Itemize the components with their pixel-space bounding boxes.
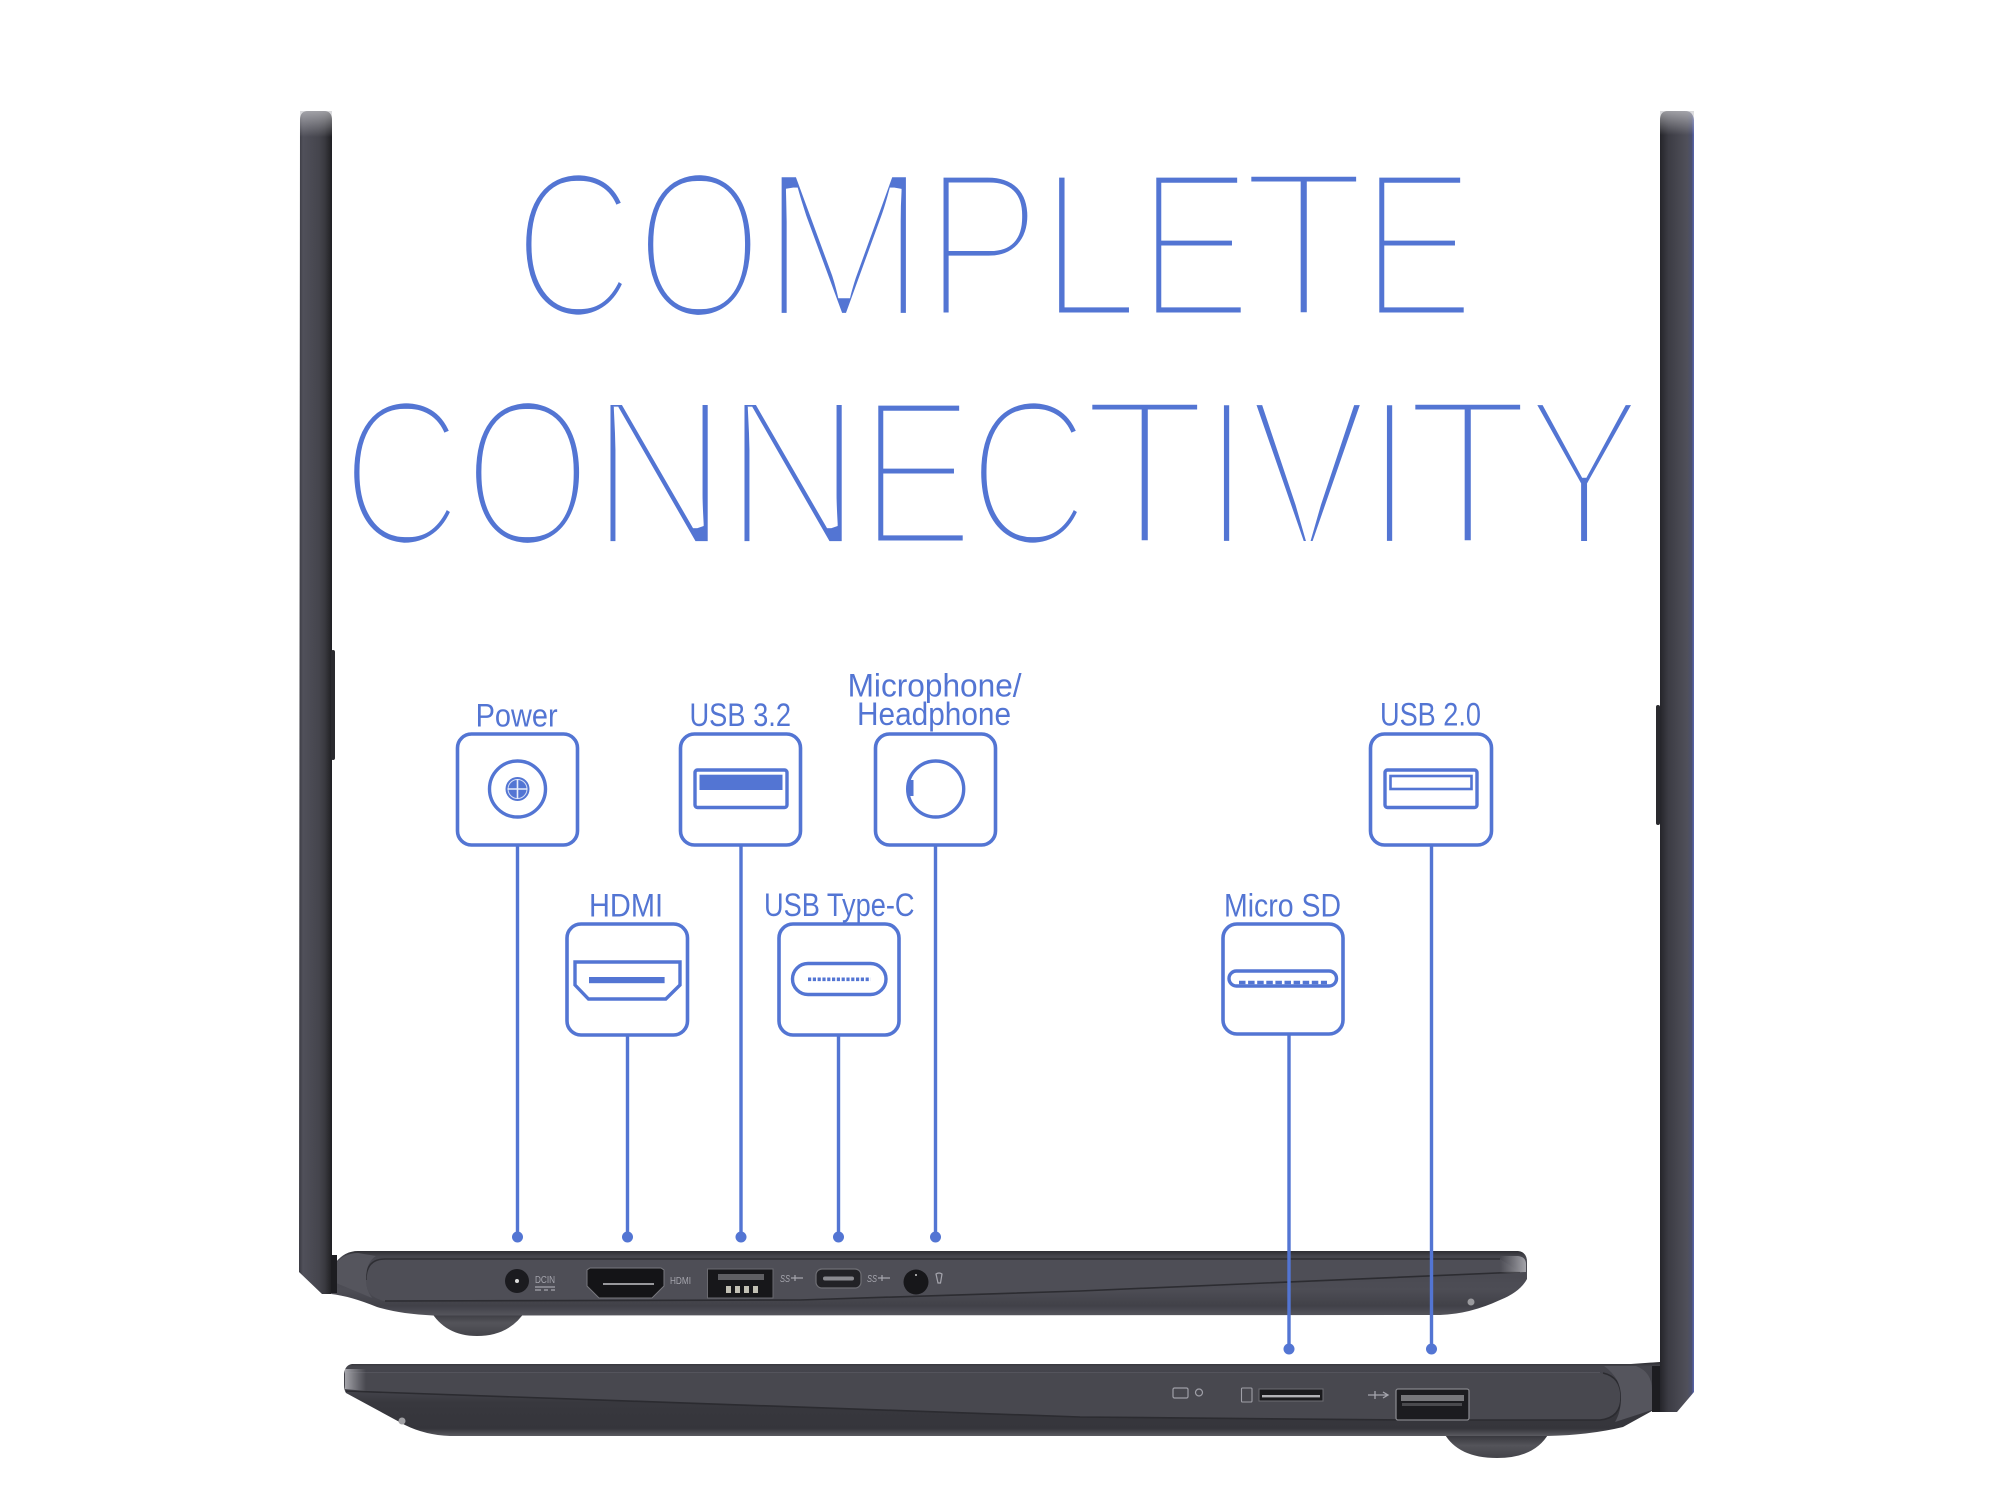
title line 2: C (967, 354, 1091, 591)
title line 2: Y (1524, 354, 1644, 591)
title line 2: C (340, 354, 464, 591)
callout: HDMI (567, 888, 688, 1035)
USB 3.2 port: SS (780, 1274, 790, 1285)
laptop lid: right edge (1656, 111, 1694, 1412)
title line 1: E (1359, 126, 1477, 363)
status LEDs (1173, 1388, 1202, 1398)
USB-C port: SS (867, 1274, 877, 1285)
audio jack (904, 1270, 942, 1294)
laptop: left side view with ports (331, 1251, 1527, 1336)
USB 3.2 port (708, 1269, 803, 1298)
title line 1: P (923, 126, 1043, 363)
title line 1: L (1038, 126, 1141, 363)
callout: Micro SD (1223, 888, 1343, 1034)
USB-C port (816, 1269, 890, 1288)
port panel (366, 1259, 1520, 1301)
HDMI port (587, 1268, 691, 1298)
HDMI port: HDMI (670, 1276, 691, 1287)
icon: USB 3.2 port (695, 770, 787, 808)
leader lines (512, 845, 1437, 1354)
title line 2: I (1203, 354, 1250, 591)
left end highlight (345, 1369, 366, 1391)
title line 1 (512, 125, 1477, 364)
DC jack (505, 1269, 555, 1293)
title line 1: E (1136, 126, 1254, 363)
title line 1: C (512, 126, 636, 363)
title line 2: N (723, 354, 863, 591)
right end highlight (1500, 1256, 1526, 1273)
callout: USB Type-C (764, 887, 914, 1035)
DC jack: DCIN (535, 1275, 555, 1286)
icon: power jack (490, 761, 546, 817)
callout: USB 3.2: USB 3.2 (690, 697, 791, 733)
screw (398, 1418, 406, 1424)
USB 2.0 port (1368, 1389, 1469, 1420)
callout: HDMI: HDMI (589, 888, 663, 924)
callout: USB 3.2 (680, 697, 800, 845)
callout: Microphone/Headphone: Microphone/ (848, 668, 1022, 704)
title: T (1404, 352, 1532, 591)
callout: Micro SD: Micro SD (1224, 888, 1341, 924)
title: T (1240, 125, 1367, 364)
rubber foot (430, 1310, 526, 1336)
screw (1468, 1298, 1474, 1306)
title line 2: E (858, 354, 976, 591)
icon: audio jack (908, 761, 964, 817)
icon: USB-C port (792, 964, 886, 994)
title line 2 (340, 352, 1644, 591)
icon: USB 2.0 port (1385, 770, 1477, 808)
port panel (346, 1373, 1621, 1420)
rubber foot: front (474, 1433, 545, 1436)
icon: micro SD slot (1229, 971, 1336, 986)
hinge block (336, 1253, 376, 1298)
lid hinge shadow (331, 1255, 337, 1293)
rubber foot: back (1444, 1433, 1549, 1458)
upper band line (346, 1372, 1600, 1374)
callout: Power (458, 698, 578, 845)
title line 1: M (759, 126, 928, 363)
laptop body (331, 1251, 1527, 1316)
hinge block (1604, 1366, 1652, 1422)
micro SD slot (1242, 1388, 1323, 1402)
title line 2: N (589, 354, 729, 591)
laptop: right side view with ports (344, 1362, 1660, 1458)
title (340, 125, 1644, 591)
lid hinge shadow (1652, 1366, 1660, 1412)
title line 2: O (463, 354, 592, 591)
title line 2: V (1248, 354, 1368, 591)
title: T (1081, 352, 1209, 591)
laptop lid: left edge (299, 111, 335, 1294)
callout: USB 2.0: USB 2.0 (1380, 696, 1481, 732)
callout: Microphone/Headphone (848, 668, 1022, 845)
callout: Microphone/Headphone: Headphone (857, 696, 1011, 732)
laptop body (344, 1362, 1660, 1436)
callout: USB 2.0 (1370, 696, 1492, 845)
title line 1: O (635, 126, 763, 363)
callout: USB Type-C: USB Type-C (764, 887, 914, 923)
icon: HDMI port (575, 962, 680, 999)
title line 2: I (1366, 354, 1413, 591)
callout: Power: Power (476, 698, 558, 734)
